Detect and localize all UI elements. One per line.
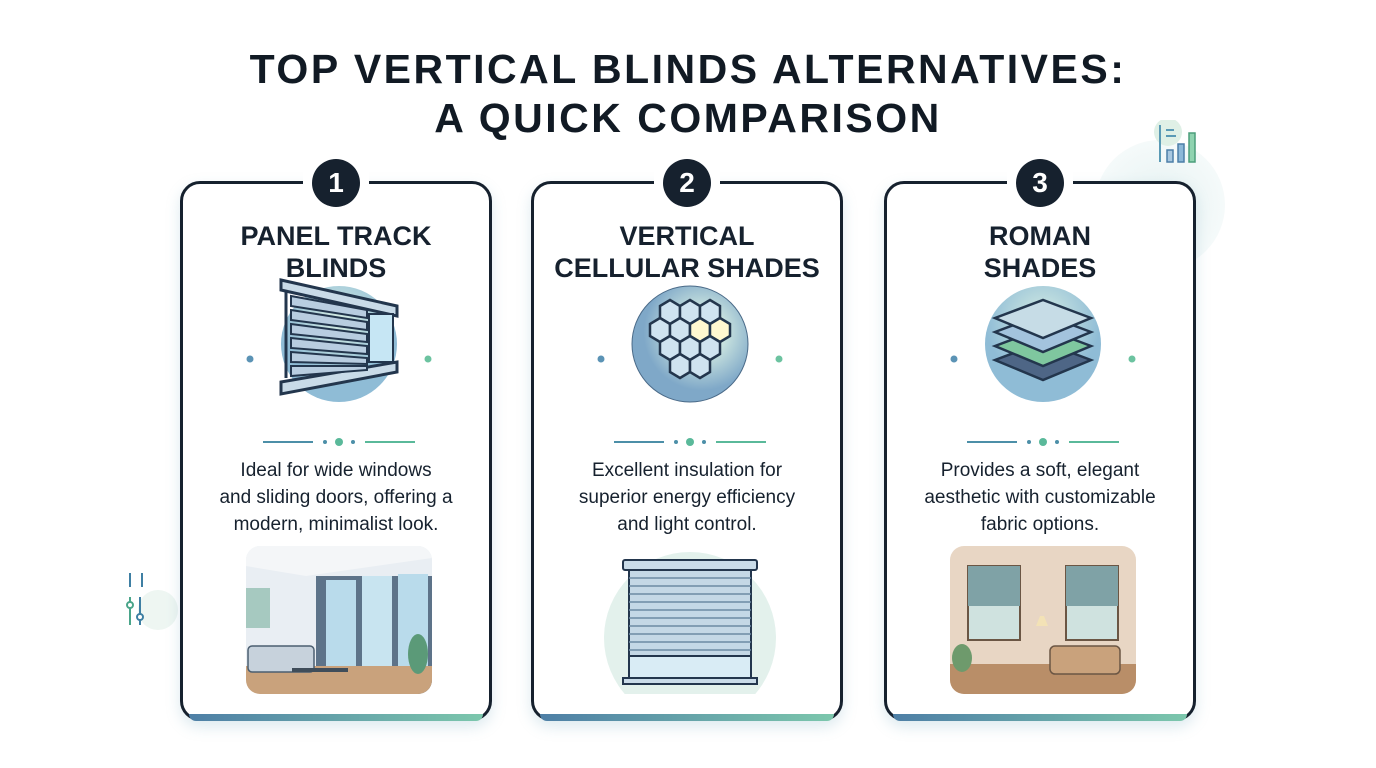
divider <box>967 438 1119 446</box>
image: cozy room with roman shades <box>950 546 1136 694</box>
panel: panel track blinds <box>180 181 492 721</box>
description: Ideal for wide windows <box>240 460 432 481</box>
title <box>250 46 1126 141</box>
panel: roman shades <box>884 181 1196 721</box>
number badge 2 <box>654 158 720 208</box>
icon: bar chart decoration <box>1154 120 1196 163</box>
icon: honeycomb <box>598 286 782 402</box>
icon: sliders decoration left <box>126 573 178 630</box>
description: Provides a soft, elegant <box>941 460 1139 481</box>
heading: vertical cellular shades <box>554 221 820 283</box>
title: TOP VERTICAL BLINDS ALTERNATIVES: <box>250 46 1126 92</box>
panel: vertical cellular shades <box>531 181 843 721</box>
heading: roman shades: ROMAN <box>989 221 1091 251</box>
icon: panel track <box>246 278 432 402</box>
icon: folded fabric stack <box>950 286 1136 402</box>
divider <box>614 438 766 446</box>
description <box>579 460 795 535</box>
number badge 1: 1 <box>328 167 344 198</box>
heading: panel track blinds: BLINDS <box>286 253 386 283</box>
heading: vertical cellular shades: CELLULAR SHADES <box>554 253 820 283</box>
description <box>219 460 453 535</box>
number badge 3 <box>1007 158 1073 208</box>
description: modern, minimalist look. <box>234 514 438 535</box>
heading: vertical cellular shades: VERTICAL <box>620 221 754 251</box>
heading: roman shades <box>984 221 1096 283</box>
background decoration circle right <box>1095 140 1225 270</box>
number badge 3: 3 <box>1032 167 1048 198</box>
description: superior energy efficiency <box>579 487 795 508</box>
heading: roman shades: SHADES <box>984 253 1096 283</box>
description: and light control. <box>617 514 757 535</box>
heading: panel track blinds: PANEL TRACK <box>240 221 432 251</box>
description: aesthetic with customizable <box>924 487 1156 508</box>
description <box>924 460 1156 535</box>
description: fabric options. <box>981 514 1099 535</box>
number badge 1 <box>303 158 369 208</box>
title: A QUICK COMPARISON <box>434 95 942 141</box>
heading: panel track blinds <box>240 221 432 283</box>
description: Excellent insulation for <box>592 460 782 481</box>
image: modern living room <box>246 546 432 694</box>
image: cellular shade window <box>604 552 776 694</box>
description: and sliding doors, offering a <box>219 487 453 508</box>
number badge 2: 2 <box>679 167 695 198</box>
divider <box>263 438 415 446</box>
